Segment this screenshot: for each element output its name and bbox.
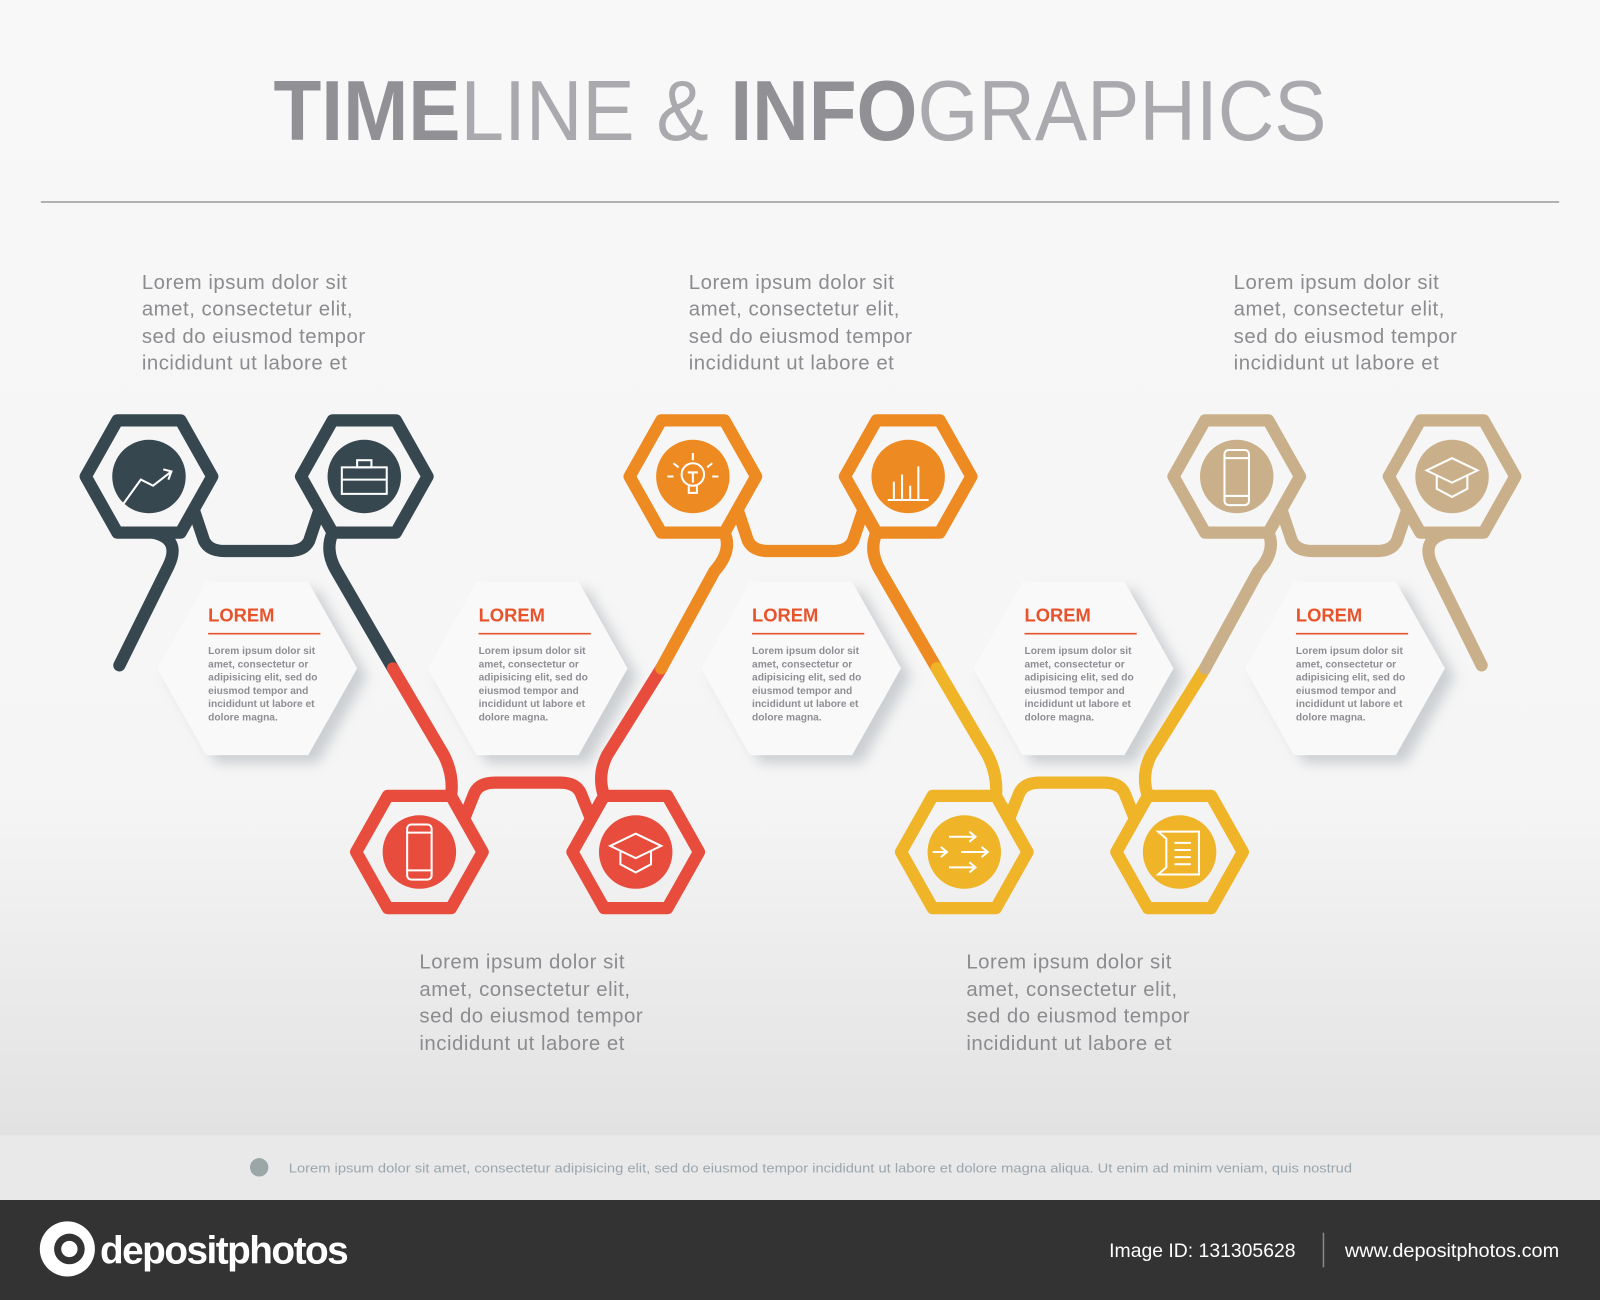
cards: amet, consectetur or (208, 659, 308, 670)
bottom text blocks: incididunt ut labore et (419, 1033, 625, 1055)
icon: arrows (928, 815, 1001, 889)
cards (157, 582, 1445, 755)
credit bar: www.depositphotos.com (1344, 1240, 1559, 1262)
top text blocks: incididunt ut labore et (142, 352, 347, 374)
top text blocks: sed do eiusmod tempor (142, 326, 366, 348)
cards: adipisicing elit, sed do (479, 673, 588, 684)
icon: phone tan (1200, 440, 1273, 513)
cards: incididunt ut labore et (1024, 699, 1131, 710)
cards: incididunt ut labore et (752, 699, 859, 710)
cards: Lorem ipsum dolor sit (752, 646, 860, 657)
icon: document (1143, 815, 1216, 889)
icon: growth chart (112, 440, 186, 513)
bottom text blocks: amet, consectetur elit, (419, 979, 631, 1001)
cards: incididunt ut labore et (479, 699, 586, 710)
cards: eiusmod tempor and (479, 686, 579, 697)
cards: dolore magna. (208, 712, 278, 723)
cards: eiusmod tempor and (752, 686, 852, 697)
cards: adipisicing elit, sed do (1296, 673, 1405, 684)
footer note band (0, 1136, 1600, 1200)
icon: graduation cap red (599, 815, 672, 889)
cards: dolore magna. (479, 712, 548, 723)
cards: amet, consectetur or (752, 659, 852, 670)
icon: bar chart (871, 440, 945, 513)
cards: incididunt ut labore et (1296, 699, 1403, 710)
group 2 red (356, 668, 699, 908)
cards: eiusmod tempor and (208, 686, 308, 697)
icon: graduation cap tan (1415, 440, 1489, 513)
credit bar: Image ID: 131305628 (1109, 1240, 1296, 1262)
bottom text blocks: Lorem ipsum dolor sit (419, 951, 625, 973)
cards: eiusmod tempor and (1024, 686, 1125, 697)
cards: eiusmod tempor and (1296, 686, 1396, 697)
cards: LOREM (208, 604, 274, 625)
top text blocks: sed do eiusmod tempor (689, 326, 913, 348)
footer note band: Lorem ipsum dolor sit amet, consectetur adipisicing elit, sed do eiusmod tempor incididunt ut labore et dolore magna aliqua. Ut enim ad minim veniam, quis nostrud (289, 1160, 1352, 1175)
cards: Lorem ipsum dolor sit (1296, 646, 1404, 657)
bottom text blocks: sed do eiusmod tempor (966, 1005, 1190, 1027)
top text blocks: amet, consectetur elit, (689, 298, 900, 320)
cards: adipisicing elit, sed do (208, 673, 317, 684)
top text blocks: Lorem ipsum dolor sit (142, 272, 347, 294)
group 1 dark (86, 420, 428, 668)
icon: light bulb (656, 440, 730, 513)
group 4 yellow (901, 668, 1243, 908)
timeline path network (86, 420, 1515, 908)
bottom text blocks: incididunt ut labore et (966, 1033, 1172, 1055)
icon: briefcase (328, 440, 401, 513)
cards: adipisicing elit, sed do (1024, 673, 1134, 684)
top text blocks: incididunt ut labore et (1234, 352, 1439, 374)
cards: dolore magna. (752, 712, 822, 723)
top text blocks: incididunt ut labore et (689, 352, 894, 374)
title: TIMELINE & INFOGRAPHICS (273, 63, 1327, 159)
top text blocks: sed do eiusmod tempor (1234, 326, 1457, 348)
cards: adipisicing elit, sed do (752, 673, 861, 684)
group 5 tan (1173, 420, 1515, 668)
top text blocks: amet, consectetur elit, (142, 298, 353, 320)
cards: Lorem ipsum dolor sit (208, 646, 316, 657)
icon: phone red (383, 815, 456, 889)
cards: LOREM (1024, 604, 1091, 625)
cards: incididunt ut labore et (208, 699, 315, 710)
top text blocks: amet, consectetur elit, (1234, 298, 1445, 320)
cards: dolore magna. (1024, 712, 1094, 723)
credit bar (0, 1200, 1600, 1300)
cards: LOREM (479, 604, 545, 625)
cards: dolore magna. (1296, 712, 1366, 723)
cards: LOREM (752, 604, 818, 625)
top text blocks: Lorem ipsum dolor sit (689, 272, 894, 294)
cards: amet, consectetur or (1024, 659, 1125, 670)
cards: amet, consectetur or (1296, 659, 1396, 670)
bottom text blocks: sed do eiusmod tempor (419, 1005, 643, 1027)
cards: Lorem ipsum dolor sit (479, 646, 586, 657)
bottom text blocks: amet, consectetur elit, (966, 979, 1178, 1001)
bottom text blocks: Lorem ipsum dolor sit (966, 951, 1172, 973)
cards: Lorem ipsum dolor sit (1024, 646, 1132, 657)
group 3 orange (630, 420, 971, 668)
cards: amet, consectetur or (479, 659, 579, 670)
credit bar: depositphotos (100, 1229, 347, 1272)
top text blocks: Lorem ipsum dolor sit (1234, 272, 1439, 294)
top text blocks (142, 272, 1457, 374)
bottom text blocks (419, 951, 1190, 1055)
cards: LOREM (1296, 604, 1362, 625)
